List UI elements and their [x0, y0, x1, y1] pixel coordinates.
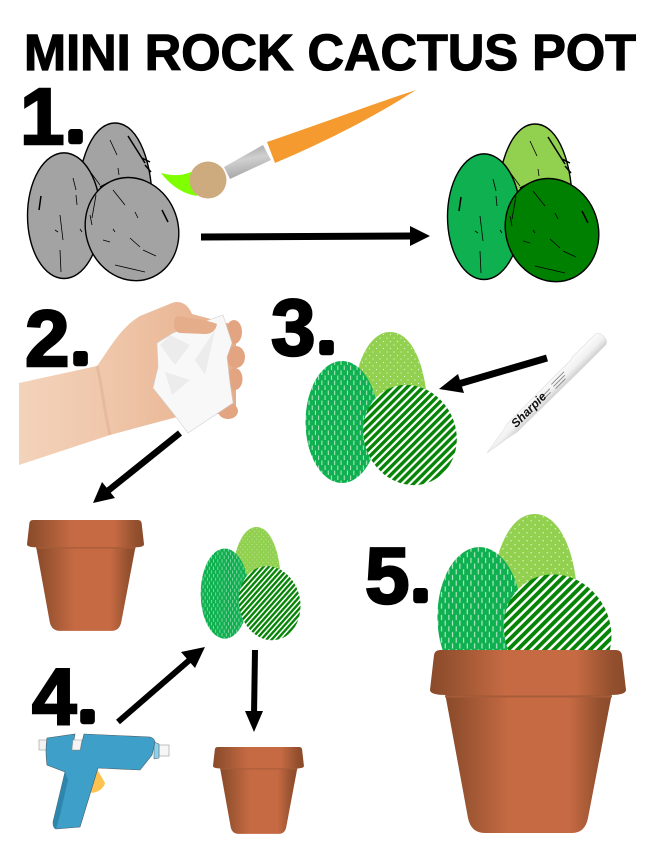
step 5 number: .: [412, 548, 429, 613]
brush ferrule: [224, 145, 271, 179]
marker body: [482, 331, 609, 458]
large terracotta pot: [430, 650, 626, 833]
step 3 number: .: [318, 300, 335, 365]
arrow: gray rocks to painted rocks: [201, 226, 430, 246]
step 3: patterned rocks: [306, 332, 457, 485]
gun nozzle collar: [154, 742, 159, 759]
finished cactus rocks: [437, 514, 611, 689]
step 4 number: 4: [32, 652, 76, 741]
marker fine print: [540, 372, 568, 400]
small pot with no rocks: [213, 747, 304, 834]
icon: paint brush: [161, 90, 416, 198]
hand crumpling paper: [19, 302, 245, 465]
step 4: small patterned rocks: [201, 527, 301, 640]
fingers: [218, 320, 245, 419]
step 5 number: 5: [365, 531, 410, 620]
hand and arm: [19, 302, 236, 465]
wrist crease: [97, 366, 110, 435]
arrow: rocks to pot: [245, 650, 263, 732]
brush handle: [267, 90, 416, 163]
icon: glue gun: [39, 734, 169, 829]
gun slot insert: [72, 740, 82, 750]
glue trigger: [89, 769, 105, 793]
brush head: [190, 162, 226, 198]
title: MINI ROCK CACTUS POT: [24, 24, 636, 81]
arrow: paper to pot: [93, 433, 180, 503]
marker brand: Sharpie: [508, 389, 549, 430]
step 2 number: 2: [25, 294, 70, 383]
gun nozzle tip: [159, 745, 169, 756]
step 1: gray rocks: [28, 123, 179, 281]
gun back cap: [39, 740, 48, 750]
step 2 number: .: [72, 311, 89, 376]
step 1 number: .: [68, 89, 84, 154]
gun body: [46, 734, 155, 829]
arrow: marker to rocks: [439, 358, 547, 393]
green paint on bristles: [161, 172, 197, 196]
crumpled paper: [153, 315, 233, 433]
step 1: painted rocks: [448, 124, 599, 282]
icon: paint marker: [481, 331, 609, 458]
step 3 number: 3: [271, 283, 316, 372]
gun handle shade: [53, 772, 68, 829]
step 4 number: .: [80, 669, 96, 734]
small terracotta pot: [27, 520, 144, 631]
thumb: [174, 316, 217, 334]
step 1 number: 1: [20, 72, 64, 161]
arrow: glue gun to rocks: [118, 647, 205, 722]
